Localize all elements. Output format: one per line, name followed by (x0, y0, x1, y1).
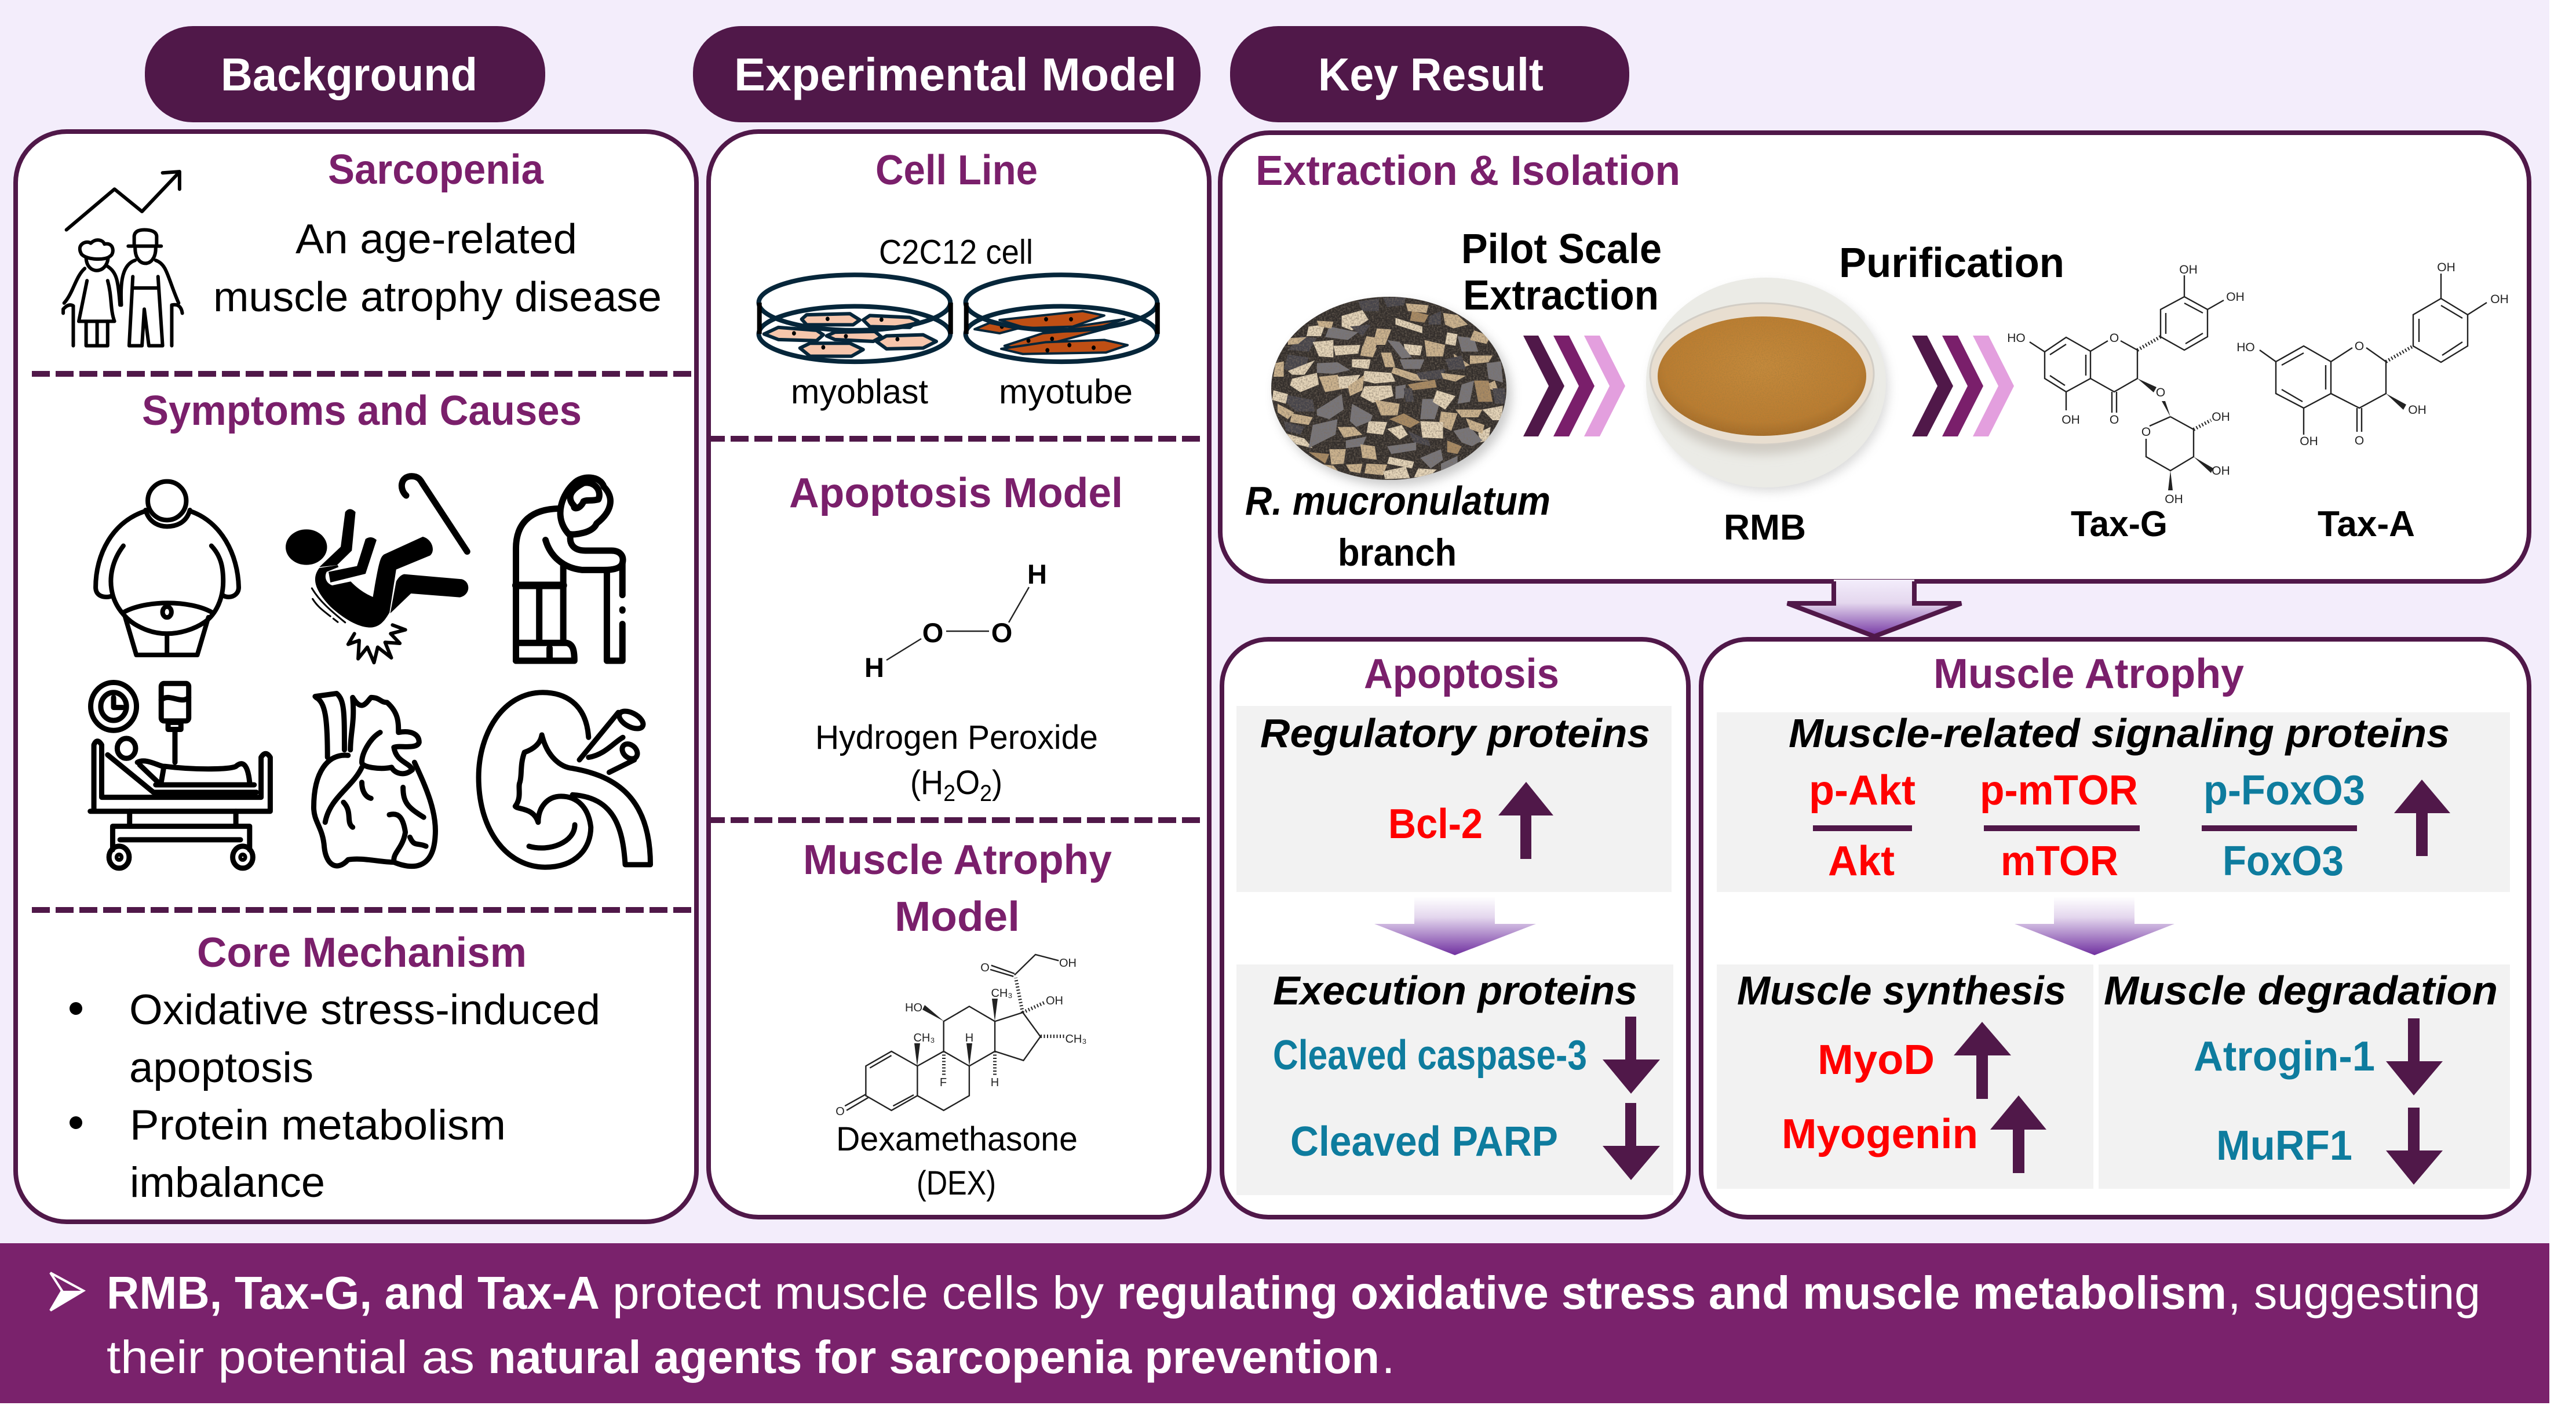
label: Purification: Purification (1839, 240, 2064, 286)
bullet list: core mechanisms: imbalance (130, 1159, 325, 1206)
label: Tax-G: Tax-G (2071, 504, 2168, 544)
bullet list: core mechanisms: Oxidative stress-induced (129, 986, 600, 1033)
arrow: Bcl-2 up (1498, 782, 1553, 859)
ratio: p-mTOR / mTOR (1980, 767, 2140, 884)
section pill: Experimental Model: Experimental Model (734, 49, 1177, 100)
structure: Tax-G (2007, 263, 2245, 506)
section pill: Experimental Model (693, 26, 1201, 122)
box: muscle synthesis: Muscle synthesis (1737, 968, 2066, 1013)
icon: kidney (479, 693, 651, 867)
photo: wood chip branch material (1269, 296, 1511, 486)
conclusion banner (0, 1243, 2549, 1403)
conclusion text line 2: . (1382, 1331, 1395, 1383)
arrow: MuRF1 down (2386, 1108, 2443, 1185)
box: execution proteins: Cleaved caspase-3 (1273, 1032, 1587, 1079)
icon: obese person (96, 482, 239, 655)
heading: Cell Line: Cell Line (875, 147, 1038, 194)
label: H2O2 formula: O (955, 764, 980, 802)
arrow: Atrogin-1 down (2386, 1018, 2443, 1095)
icon: myotube culture dish (966, 275, 1158, 362)
photo: RMB powder in petri dish (1646, 278, 1888, 491)
ratio: p-mTOR / mTOR: p-mTOR (1980, 767, 2138, 814)
label: Pilot Scale Extraction (1461, 226, 1662, 319)
label: myotube: myotube (999, 373, 1133, 411)
box: muscle degradation: Muscle degradation (2104, 968, 2498, 1013)
heading: Muscle Atrophy Model (803, 837, 1112, 940)
ratio: p-FoxO3 / FoxO3 (2202, 767, 2365, 884)
structure: Tax-A: HO (2236, 341, 2255, 354)
heading: Muscle Atrophy Model: Model (895, 894, 1020, 940)
panel: apoptosis results (1222, 639, 1688, 1217)
heading: Muscle Atrophy Model: Muscle Atrophy (803, 837, 1112, 883)
structure: dexamethasone: CH₃ (1065, 1033, 1087, 1046)
label: R. mucronulatum branch (1245, 478, 1550, 574)
heading: Sarcopenia: Sarcopenia (328, 147, 544, 193)
box: muscle degradation: MuRF1 (2216, 1123, 2352, 1169)
panel: experimental model (709, 132, 1209, 1217)
box: regulatory proteins: Regulatory proteins (1260, 711, 1650, 756)
structure: hydrogen peroxide (864, 559, 1047, 683)
label: R. mucronulatum branch: branch (1338, 531, 1457, 574)
structure: Tax-G: OH (2061, 413, 2080, 427)
label: RMB: RMB (1724, 508, 1806, 548)
arrow: extraction to results (1785, 580, 1964, 638)
conclusion text line 1 (107, 1267, 2480, 1319)
label: Pilot Scale Extraction: Pilot Scale (1461, 226, 1662, 272)
ratio: p-mTOR / mTOR: mTOR (2001, 838, 2118, 884)
box: signaling proteins: Muscle-related signaling proteins (1789, 711, 2450, 756)
text: sarcopenia definition: An age-related (295, 216, 577, 263)
section pill: Key Result (1230, 26, 1629, 122)
structure: hydrogen peroxide: O (922, 617, 943, 648)
heading: Symptoms and Causes: Symptoms and Causes (142, 388, 582, 434)
arrow: signaling to synthesis and degradation (2015, 897, 2174, 955)
heading: Apoptosis: Apoptosis (1364, 651, 1559, 697)
box: regulatory proteins: Bcl-2 (1388, 801, 1483, 847)
icon: person falling (286, 476, 468, 662)
label: Dexamethasone (DEX): Dexamethasone (836, 1120, 1078, 1158)
structure: dexamethasone: O (835, 1105, 845, 1118)
panel: extraction and isolation (1220, 133, 2529, 581)
structure: dexamethasone: O (980, 962, 990, 974)
bullet list: core mechanisms (70, 986, 600, 1206)
structure: Tax-G: O (2141, 425, 2151, 439)
arrow: signaling up (2394, 780, 2450, 856)
structure: Tax-G: OH (2212, 410, 2230, 424)
conclusion text line 1: protect muscle cells by (612, 1267, 1104, 1319)
conclusion text line 1: , suggesting (2228, 1267, 2480, 1319)
bullet list: core mechanisms: apoptosis (129, 1044, 313, 1091)
ratio: p-Akt / Akt (1809, 767, 1915, 884)
section pill: Background (145, 26, 545, 122)
panel: muscle atrophy results (1701, 639, 2529, 1217)
structure: Tax-G: OH (2165, 493, 2183, 506)
box: muscle degradation (2099, 964, 2510, 1189)
chevrons: extraction step (1523, 336, 1625, 436)
section pill: Key Result: Key Result (1318, 49, 1544, 100)
icon: stooped elder with walker (516, 478, 623, 661)
label: C2C12 cell: C2C12 cell (879, 233, 1033, 271)
structure: Tax-G: HO (2007, 332, 2026, 345)
structure: dexamethasone: CH₃ (913, 1032, 935, 1044)
structure: Tax-A: OH (2300, 435, 2318, 448)
arrow: regulatory to execution (1374, 897, 1536, 955)
structure: dexamethasone: HO (905, 1002, 922, 1014)
conclusion text line 2 (107, 1331, 1395, 1383)
arrow: cleaved PARP down (1603, 1103, 1660, 1180)
heading: Muscle Atrophy: Muscle Atrophy (1933, 651, 2244, 697)
heading: Core Mechanism: Core Mechanism (197, 930, 527, 976)
structure: Tax-G: OH (2212, 464, 2230, 478)
structure: dexamethasone: OH (1046, 995, 1063, 1007)
heading: Apoptosis Model: Apoptosis Model (789, 470, 1123, 516)
structure: Tax-G: OH (2226, 290, 2245, 304)
structure: Tax-G: OH (2179, 263, 2198, 276)
bullet list: core mechanisms: Protein metabolism (130, 1102, 506, 1149)
ratio: p-Akt / Akt: Akt (1828, 838, 1895, 884)
label: Pilot Scale Extraction: Extraction (1463, 272, 1659, 319)
arrow: Myogenin up (1990, 1095, 2046, 1173)
text: sarcopenia definition (213, 216, 662, 321)
structure: Tax-G: O (2110, 413, 2119, 427)
structure: Tax-A: OH (2408, 403, 2427, 417)
structure: Tax-A: O (2355, 340, 2364, 353)
panel: background (16, 132, 696, 1222)
structure: hydrogen peroxide: H (1027, 559, 1047, 589)
icon: elderly couple with rising trend (63, 172, 183, 346)
label: Hydrogen Peroxide: Hydrogen Peroxide (815, 719, 1098, 756)
label: R. mucronulatum branch: R. mucronulatum (1245, 478, 1550, 523)
structure: hydrogen peroxide: O (991, 617, 1012, 648)
icon: patient in hospital bed (90, 683, 270, 868)
structure: Tax-G: O (2110, 332, 2119, 345)
structure: Tax-A: OH (2437, 261, 2455, 274)
structure: Tax-G: O (2156, 386, 2165, 399)
box: muscle degradation: Atrogin-1 (2194, 1033, 2375, 1080)
box: regulatory proteins (1236, 706, 1672, 892)
structure: dexamethasone: F (940, 1076, 947, 1089)
heading: Extraction and Isolation: Extraction & Isolation (1256, 148, 1680, 194)
structure: Tax-A (2236, 261, 2509, 448)
structure: dexamethasone: H (965, 1032, 973, 1044)
ratio: p-FoxO3 / FoxO3: p-FoxO3 (2203, 767, 2365, 814)
arrow: cleaved caspase-3 down (1603, 1017, 1660, 1094)
conclusion text line 2: natural agents for sarcopenia prevention (488, 1331, 1380, 1383)
arrow: MyoD up (1954, 1022, 2011, 1099)
box: signaling proteins (1717, 711, 2510, 892)
ratio: p-FoxO3 / FoxO3: FoxO3 (2223, 838, 2344, 884)
label: Tax-A: Tax-A (2318, 504, 2415, 544)
conclusion text line 1: regulating oxidative stress and muscle metabolism (1117, 1267, 2227, 1319)
label: H2O2 formula: (H (910, 764, 946, 802)
icon: myoblast culture dish (759, 275, 951, 362)
box: execution proteins: Execution proteins (1273, 968, 1637, 1013)
box: muscle synthesis (1717, 964, 2093, 1189)
label: H2O2 formula: ) (992, 764, 1002, 802)
box: execution proteins (1236, 964, 1673, 1195)
label: H2O2 formula: 2 (943, 781, 955, 806)
structure: Tax-A: OH (2490, 293, 2509, 306)
conclusion text line 2: their potential as (107, 1331, 475, 1383)
text: sarcopenia definition: muscle atrophy disease (213, 274, 662, 321)
box: muscle synthesis: Myogenin (1782, 1111, 1978, 1157)
icon: arrow bullet (50, 1273, 83, 1310)
box: muscle synthesis: MyoD (1818, 1037, 1935, 1083)
section pill: Background: Background (221, 49, 477, 100)
structure: dexamethasone: CH₃ (991, 987, 1013, 1000)
structure: Tax-A: O (2355, 434, 2364, 447)
conclusion text line 1: RMB, Tax-G, and Tax-A (107, 1267, 600, 1319)
box: execution proteins: Cleaved PARP (1290, 1119, 1558, 1165)
label: Dexamethasone (DEX): (DEX) (917, 1164, 996, 1202)
ratio: p-Akt / Akt: p-Akt (1809, 767, 1915, 814)
icon: heart (313, 693, 435, 866)
label: H2O2 formula: 2 (980, 781, 992, 806)
structure: dexamethasone: H (991, 1076, 999, 1089)
label: myoblast: myoblast (791, 373, 928, 411)
structure: dexamethasone (835, 955, 1087, 1118)
chevrons: purification step (1912, 336, 2014, 436)
label: Dexamethasone (DEX) (836, 1120, 1078, 1202)
structure: hydrogen peroxide: H (864, 652, 884, 683)
structure: dexamethasone: OH (1059, 957, 1077, 970)
